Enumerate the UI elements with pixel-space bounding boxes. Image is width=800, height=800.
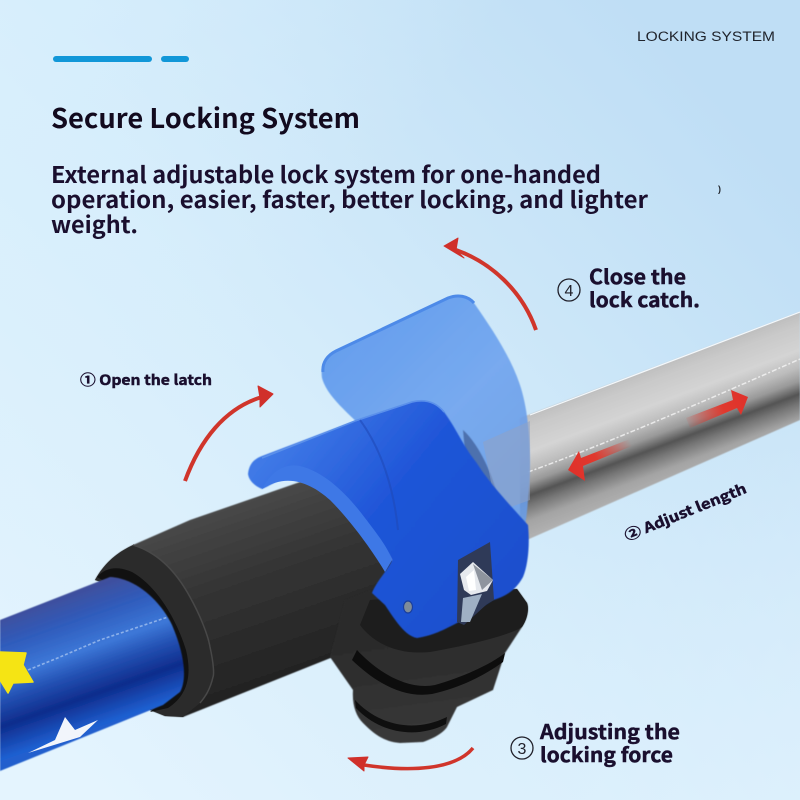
label 4: close the lock catch: lock catch. [589, 284, 700, 313]
accent bars [53, 56, 189, 62]
arrow: adjusting the locking force [348, 748, 473, 771]
product: blue lock clip [248, 401, 529, 638]
arrow: open the latch [185, 386, 273, 481]
arrow: close the lock catch [444, 238, 536, 330]
label 3: adjusting the locking force: locking force [540, 739, 673, 768]
product: black collar [95, 482, 405, 717]
description text [51, 156, 649, 240]
label 3: adjusting the locking force [511, 716, 680, 768]
description text: operation, easier, faster, better locking, and lighter [51, 181, 649, 215]
label 4: close the lock catch [558, 261, 700, 313]
arrow: pole extends right [686, 390, 748, 428]
section tag: locking system: LOCKING SYSTEM [637, 29, 775, 44]
description text: External adjustable lock system for one-handed [51, 156, 601, 190]
clip slot and screw [457, 542, 494, 625]
rivet [404, 601, 412, 613]
label 4: close the lock catch: Close the [589, 261, 686, 290]
icon: white star [28, 717, 98, 753]
label 4: close the lock catch: 4 [565, 283, 574, 300]
product: lower black lock body [330, 589, 528, 743]
stray mark: ) [718, 184, 721, 194]
product: translucent open lock catch [322, 296, 530, 545]
label 3: adjusting the locking force: 3 [518, 741, 527, 758]
title: Secure Locking System [51, 97, 360, 136]
description text: weight. [51, 206, 138, 240]
label 1: open the latch: ① Open the latch [80, 370, 212, 390]
product: silver pole [520, 312, 800, 543]
icon: yellow star [0, 652, 33, 693]
product: blue pole with stars [0, 568, 189, 771]
label 3: adjusting the locking force: Adjusting the [539, 716, 680, 745]
arrow: pole retracts left [568, 439, 632, 481]
label 2: adjust length: ② Adjust length [621, 478, 749, 546]
